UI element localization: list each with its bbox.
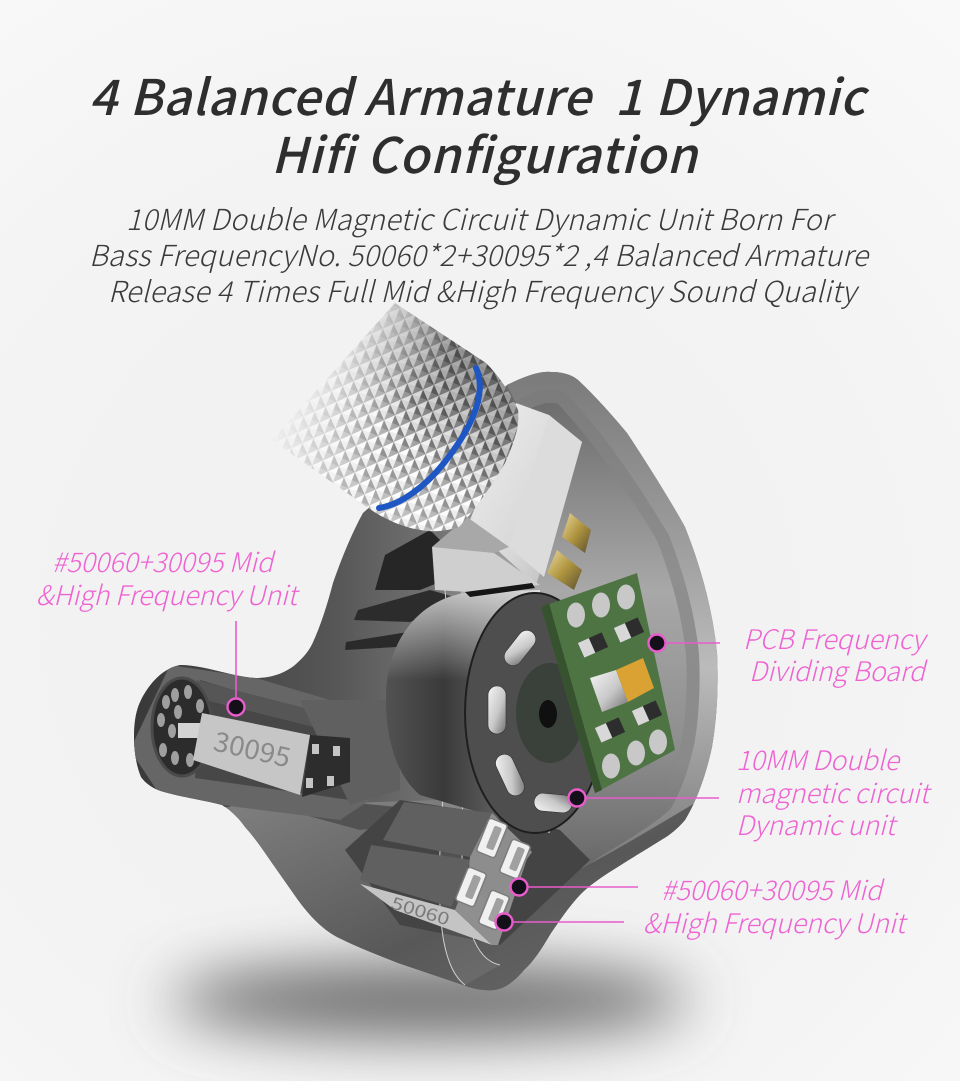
knurled cable connector [272, 303, 518, 531]
callout: left mid high frequency unit: &High Frequency Unit [36, 574, 300, 613]
dynamic driver disc [465, 593, 605, 833]
subtitle text block: Release 4 Times Full Mid &High Frequency Sound Quality [108, 269, 860, 311]
silver chip [590, 670, 628, 712]
callout: dynamic unit: magnetic circuit [736, 772, 932, 811]
connector block [470, 403, 582, 585]
blue ring [379, 368, 480, 508]
left dark section [130, 500, 470, 810]
callout: lower mid high frequency unit [496, 869, 908, 941]
title [89, 59, 870, 188]
dynamic driver drum [386, 590, 550, 833]
balanced armature 30095 [178, 713, 350, 797]
driver centre [516, 663, 584, 763]
PCB board [541, 573, 675, 793]
nozzle mesh [152, 678, 212, 776]
callout: dynamic unit: 10MM Double [736, 739, 901, 778]
balanced armature 50060: 50060 [389, 889, 453, 930]
pad details [465, 825, 525, 923]
earphone illustration [120, 303, 740, 1000]
silver pads [455, 818, 531, 930]
gold pins [562, 513, 591, 553]
subtitle text block [89, 197, 870, 311]
earphone shell [120, 360, 740, 1000]
nozzle [134, 666, 366, 820]
callout: dynamic unit: Dynamic unit [736, 804, 898, 843]
balanced armature 30095: 30095 [210, 720, 295, 775]
translucent cover band [440, 591, 498, 984]
driver terminals [488, 627, 573, 814]
subtitle text block: Bass FrequencyNo. 50060*2+30095*2 ,4 Balanced Armature [89, 233, 870, 275]
balanced armature 50060 [360, 802, 532, 945]
PCB holes [567, 584, 667, 778]
subtitle text block: 10MM Double Magnetic Circuit Dynamic Unit Born For [126, 197, 837, 239]
callout: lower mid high frequency unit: &High Frequency Unit [643, 902, 908, 941]
callout: left mid high frequency unit: #50060+30095 Mid [52, 541, 277, 580]
lower lobe [230, 798, 700, 1000]
transparent cover line [439, 590, 500, 985]
title: Hifi Configuration [271, 117, 699, 188]
callout: PCB frequency dividing board [648, 618, 929, 689]
callout: dynamic unit [568, 739, 932, 843]
callout: PCB frequency dividing board: PCB Frequency [743, 618, 929, 657]
gold chip [616, 658, 654, 702]
callout: lower mid high frequency unit: #50060+30095 Mid [661, 869, 886, 908]
title: 4 Balanced Armature 1 Dynamic [89, 59, 870, 130]
ground shadow [170, 964, 690, 1036]
PCB components [578, 617, 662, 743]
callout: left mid high frequency unit [36, 541, 300, 716]
callout: PCB frequency dividing board: Dividing Board [749, 650, 929, 689]
